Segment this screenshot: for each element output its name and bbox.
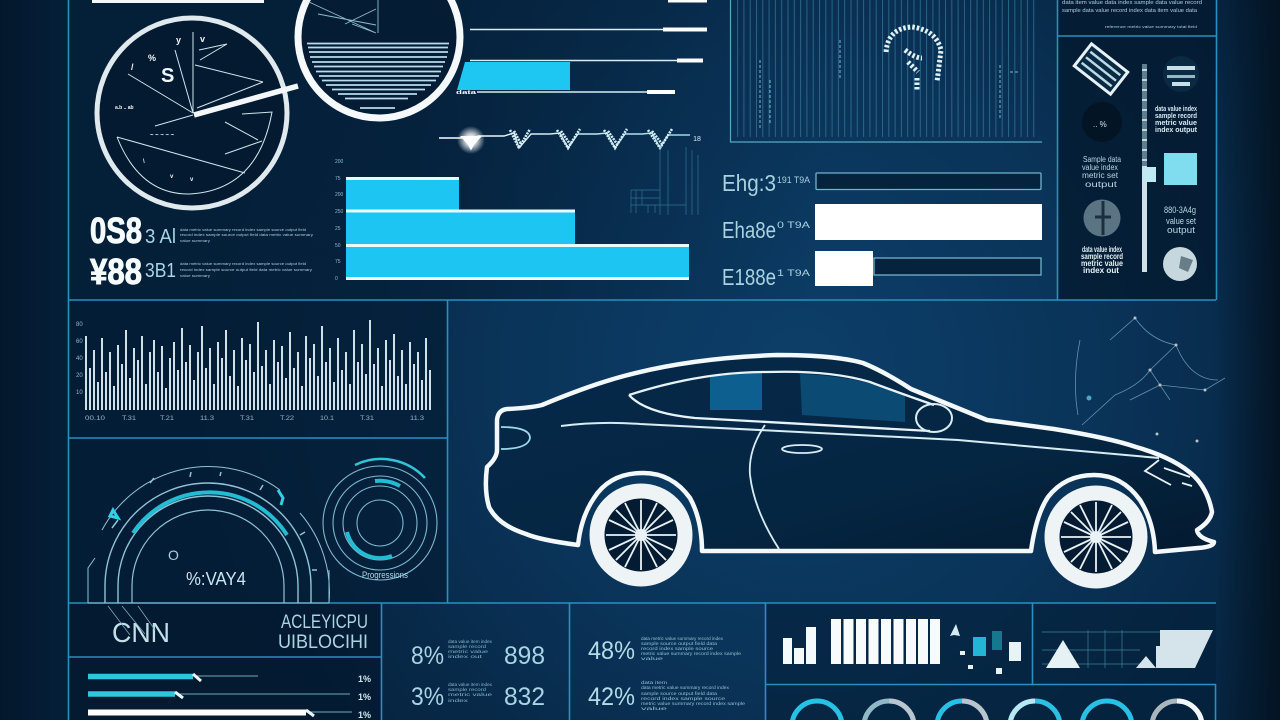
tail light: [501, 427, 530, 449]
panel: top right text strip: [1062, 0, 1202, 29]
panel: gauge: O: [168, 547, 179, 563]
panel: top right text strip: reference metric value summary total field: [1105, 24, 1197, 29]
pie small labels: [115, 34, 205, 183]
chart axis labels: 11.3: [410, 416, 425, 422]
icon: dark circle: [1082, 102, 1122, 142]
donut row: [792, 701, 1202, 720]
chart: dense column chart: [76, 320, 430, 422]
waveform: [439, 126, 701, 154]
text block small: [1164, 205, 1196, 235]
pie white slice: [194, 86, 298, 115]
value row one: data metric value summary record index sample source output field: [180, 228, 306, 232]
panel: percent stats left: 832: [504, 683, 545, 711]
axis labels: 75: [335, 259, 341, 265]
panel: dotted line chart: [730, 0, 1042, 142]
belt line: [561, 423, 1159, 458]
text block left: metric set: [1082, 171, 1119, 180]
pie small labels: %: [148, 53, 156, 63]
text block small: 880-3A4g: [1164, 205, 1196, 215]
pie small labels: v: [190, 177, 194, 183]
ring gauge: [323, 466, 437, 580]
axis labels: 0: [335, 276, 338, 282]
vertical scale: [1142, 64, 1156, 272]
panel: percent stats left: 8%: [411, 642, 444, 670]
panel: percent stats left: sample record: [448, 687, 487, 692]
chart axis labels: 10.1: [320, 416, 335, 422]
panel: title labels: CNN: [112, 617, 170, 648]
magnifier wire chart: [309, 0, 378, 33]
value row one: 3 Al: [145, 226, 176, 248]
panel: area charts: [1042, 630, 1213, 668]
cyan square: [1164, 153, 1197, 185]
text block right: data value index: [1155, 106, 1197, 113]
chart axis labels: T.31: [122, 416, 137, 422]
text block left: [1082, 155, 1121, 189]
panel: vertical icon column: [1074, 44, 1199, 281]
slider bars: [456, 0, 707, 96]
panel: white column chart: [783, 619, 1021, 674]
value row one: 0S8: [90, 210, 142, 251]
row two: 0 T9A: [777, 220, 810, 230]
panel: percent stats right: data item: [641, 680, 667, 685]
donut 4: [1010, 701, 1060, 720]
chart axis labels: 60: [76, 339, 83, 345]
value row two: data metric value summary record index sample source output field: [180, 262, 306, 266]
chart axis labels: 80: [76, 322, 83, 328]
panel: percent stats right: [588, 636, 746, 711]
donut 1: [792, 701, 842, 720]
panel: percent stats left: sample record: [448, 644, 487, 649]
panel: gauge: [88, 459, 437, 603]
waveform: 18: [693, 136, 701, 143]
donut 3: [937, 701, 987, 720]
value row one: record index sample source output field data metric value summary: [180, 233, 313, 237]
chart axis labels: [76, 322, 425, 422]
panel: slim progress bars: 1%: [358, 674, 371, 684]
panel: percent stats left: [411, 639, 545, 711]
mini grid chart: [631, 147, 698, 215]
rear wheel: [597, 491, 685, 579]
legend: pie values: [90, 210, 313, 292]
magnifier horizontal lines: [307, 44, 449, 108]
panel: percent stats right: data metric value summary record index: [641, 685, 730, 690]
panel: percent stats right: data metric value summary record index: [641, 636, 724, 641]
value row one: value summary: [180, 239, 210, 243]
value row two: ¥88: [90, 251, 142, 292]
text block left: output: [1085, 180, 1118, 189]
panel: top right text strip: data item value data index sample data value record: [1062, 0, 1202, 6]
panel: percent stats left: index: [448, 698, 469, 703]
panel: percent stats right: metric value summary record index sample: [641, 701, 746, 706]
text block right: metric value: [1155, 120, 1197, 127]
dotted globe figure: [886, 27, 941, 90]
donut 5: [1082, 701, 1132, 720]
pie small labels: \: [143, 159, 145, 165]
text block left: value index: [1082, 163, 1118, 172]
text block dense: data value index: [1082, 245, 1122, 254]
panel: title labels: ACLEYICPU: [281, 612, 368, 633]
panel: percent stats right: metric value summary record index sample: [641, 651, 742, 656]
panel: percent stats left: 3%: [411, 683, 444, 711]
text block small: value set: [1166, 216, 1196, 226]
panel: horizontal progress bars: [722, 170, 1042, 290]
panel: percent stats left: data value item index: [448, 682, 493, 687]
text block right: index output: [1155, 127, 1198, 134]
icon: stacked tilted cards: [1074, 44, 1128, 94]
pie small labels: y: [176, 35, 181, 45]
text block right: [1155, 106, 1198, 134]
large gauge arcs: [88, 467, 329, 603]
row one: [722, 170, 1041, 196]
car window glass: [710, 373, 905, 422]
panel: slim progress bars: 1%: [358, 692, 371, 702]
pie wedge lines: [117, 32, 272, 194]
panel: pie chart: [92, 0, 298, 208]
row one: 191 T9A: [777, 175, 810, 185]
panel: percent stats right: value: [641, 706, 668, 711]
panel: percent stats right: record index sample source: [641, 696, 726, 701]
axis labels: 75: [335, 176, 341, 182]
panel: percent stats left: 898: [504, 642, 545, 670]
row three: 1 T9A: [777, 268, 810, 278]
panel: percent stats left: metric value: [448, 692, 493, 697]
text block dense: sample record: [1081, 252, 1123, 261]
row two: [722, 204, 1042, 243]
value row one: [90, 210, 313, 251]
panel: percent stats right: value: [641, 656, 664, 661]
car body: [486, 355, 1214, 552]
icon: round text block: [1163, 56, 1199, 92]
text block left: Sample data: [1083, 155, 1121, 164]
value row two: record index sample source output field data metric value summary: [180, 268, 312, 272]
panel: top right text strip: sample data value record index data item value data: [1062, 8, 1197, 14]
magnifier circle: [298, 0, 460, 118]
row three: E188e: [722, 264, 776, 290]
gauge cyan arc: [133, 492, 287, 535]
car illustration: [486, 355, 1214, 581]
donut 2: [864, 701, 914, 720]
cyan slider fill: [457, 62, 570, 90]
pie small labels: S: [161, 65, 174, 87]
bar chart: cyan stepped bars: [335, 159, 689, 282]
panel: percent stats left: index out: [448, 654, 483, 659]
pie small labels: a.b .. ab: [115, 105, 134, 111]
chart axis labels: 20: [76, 373, 83, 379]
axis labels: 200: [335, 159, 344, 165]
pie small labels: ~ ~ ~ ~ ~: [150, 133, 175, 139]
gauge readout: %:VAY4: [186, 569, 246, 589]
network constellation: [1075, 316, 1225, 442]
axis labels: [335, 159, 344, 282]
value row two: value summary: [180, 274, 210, 278]
front wheel: [1052, 493, 1140, 581]
panel: percent stats left: metric value: [448, 649, 489, 654]
pie ring: [97, 18, 287, 208]
axis labels: 250: [335, 209, 344, 215]
text block small: output: [1167, 225, 1196, 235]
panel: percent stats right: sample source output field data: [641, 691, 718, 696]
donut 6: [1152, 701, 1202, 720]
pie small labels: v: [170, 174, 174, 180]
chart axis labels: T.31: [360, 416, 375, 422]
pie small labels: /: [131, 62, 134, 72]
panel: percent stats right: 42%: [588, 683, 635, 711]
axis labels: 200: [335, 192, 344, 198]
text block dense: [1081, 245, 1123, 275]
row two: Eha8e: [722, 217, 776, 243]
icon: gray dial: [1084, 200, 1120, 236]
slider bars: data: [456, 90, 476, 96]
panel: title labels: UIBLOCIHI: [278, 632, 368, 653]
icon: pale globe: [1163, 247, 1197, 281]
chart axis labels: 40: [76, 356, 83, 362]
panel: gauge: Progressions: [362, 570, 408, 580]
row three: [722, 251, 1041, 290]
panel: title labels: [108, 606, 368, 653]
chart axis labels: T.31: [240, 416, 255, 422]
panel: percent stats right: 48%: [588, 637, 635, 665]
axis labels: 50: [335, 243, 341, 249]
text block right: sample record: [1155, 113, 1197, 120]
panel: slim progress bars: [88, 674, 371, 720]
mini icons: [950, 624, 960, 636]
chart axis labels: 11.3: [200, 416, 215, 422]
panel: slim progress bars: 1%: [358, 710, 371, 720]
axis labels: 25: [335, 226, 341, 232]
chart axis labels: T.21: [160, 416, 175, 422]
door line: [750, 425, 779, 549]
value row two: [90, 251, 312, 292]
value row two: 3B1: [145, 260, 176, 282]
text block dense: metric value: [1081, 259, 1123, 268]
headlight: [1145, 460, 1192, 486]
chart axis labels: T.22: [280, 416, 295, 422]
chart axis labels: 10: [76, 390, 83, 396]
door handle: [782, 445, 822, 453]
icon: dark circle: .. %: [1093, 120, 1107, 129]
text block dense: index out: [1083, 266, 1119, 275]
car window outline: [629, 372, 934, 431]
panel: percent stats left: data value item index: [448, 639, 493, 644]
pie small labels: v: [200, 34, 205, 44]
row one: Ehg:3: [722, 170, 776, 196]
panel: percent stats right: sample source output field data: [641, 641, 718, 646]
chart axis labels: 00.10: [85, 416, 106, 422]
wing mirror: [916, 404, 952, 432]
panel: percent stats right: record index sample source: [641, 646, 714, 651]
